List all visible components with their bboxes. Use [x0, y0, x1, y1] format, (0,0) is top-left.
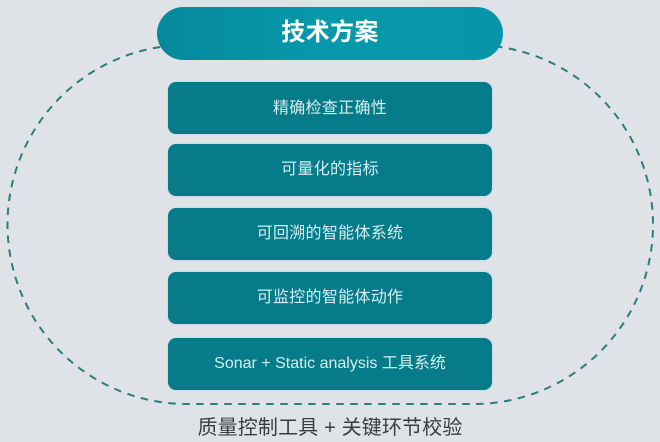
title pill [157, 7, 503, 60]
item: traceable agent system [168, 208, 492, 260]
item: Sonar and static analysis tools: Sonar + Static analysis 工具系统 [214, 355, 446, 372]
footer caption: 质量控制工具 + 关键环节校验 [197, 417, 463, 439]
item: quantifiable metrics [168, 144, 492, 196]
item: Sonar and static analysis tools [168, 338, 492, 390]
item: quantifiable metrics: 可量化的指标 [281, 161, 379, 178]
item: monitorable agent actions [168, 272, 492, 324]
item: precise correctness check: 精确检查正确性 [273, 100, 387, 117]
item: precise correctness check [168, 82, 492, 134]
item: monitorable agent actions: 可监控的智能体动作 [257, 289, 403, 306]
item: traceable agent system: 可回溯的智能体系统 [257, 225, 403, 242]
title pill: 技术方案 [281, 19, 379, 46]
